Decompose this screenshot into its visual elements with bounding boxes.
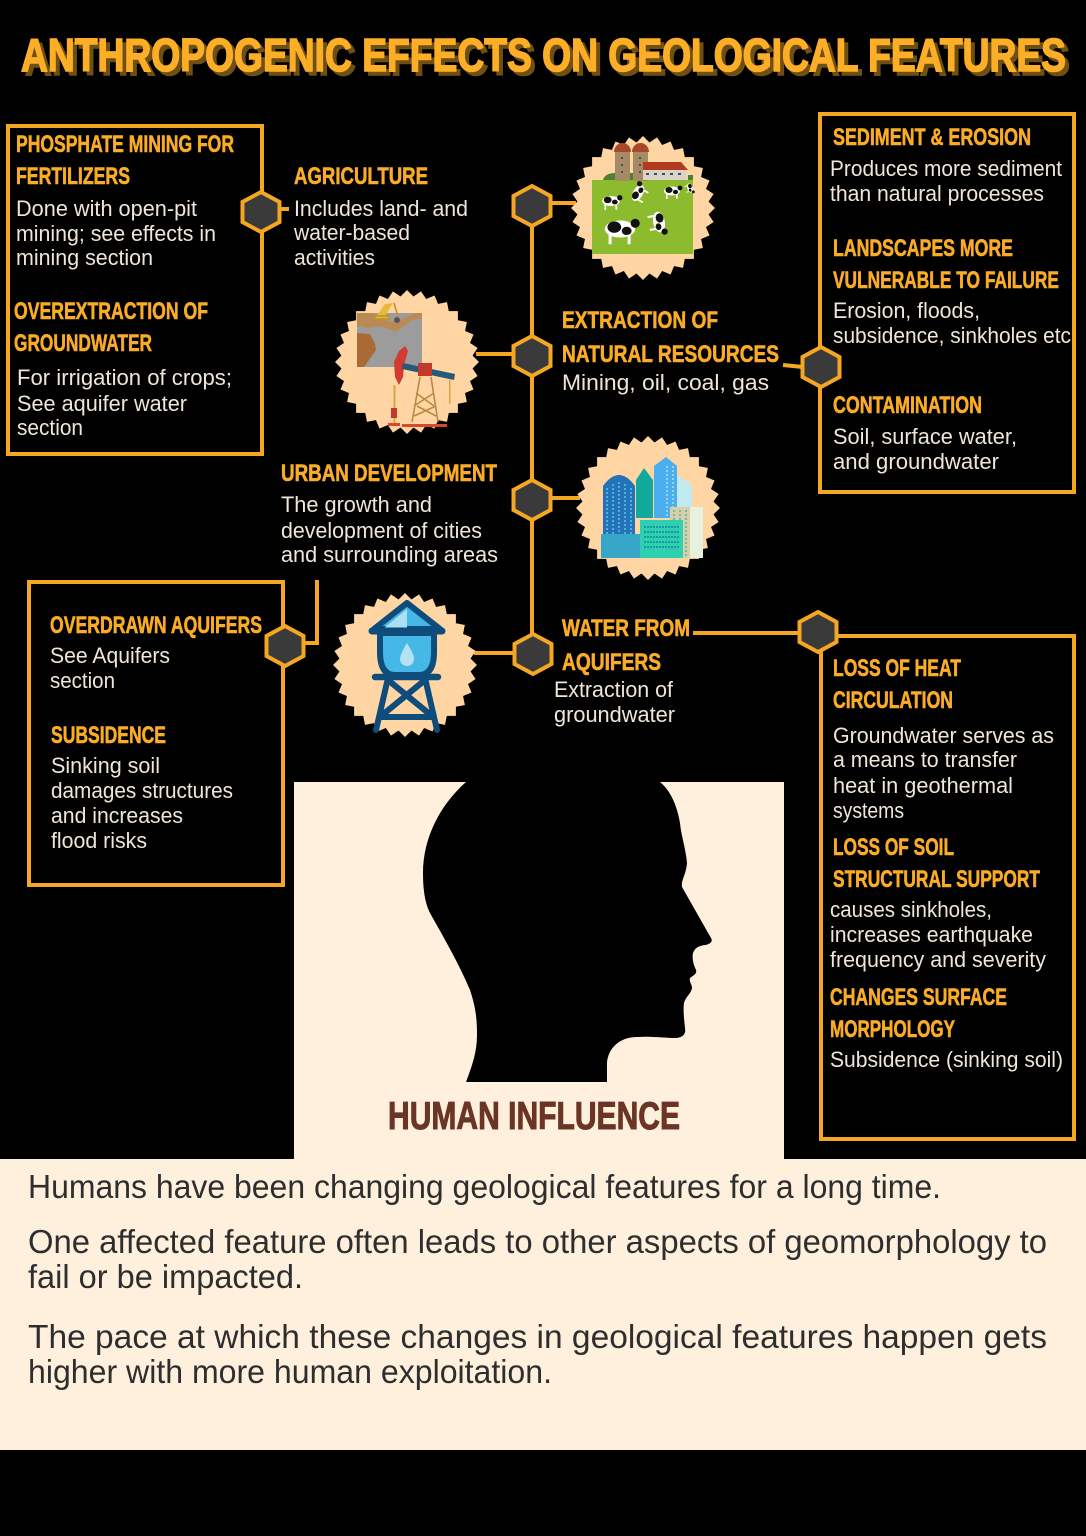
text: subsidence description: Sinking soil: [51, 753, 160, 778]
text: vulnerable description: subsidence, sinkholes etc: [833, 323, 1071, 348]
text: water from aquifers: [554, 615, 690, 727]
text: phosphate mining description: Done with open-pit: [16, 196, 198, 221]
text: agriculture: [293, 163, 468, 270]
text: soil support description: [830, 897, 1047, 972]
heading: contamination: CONTAMINATION: [833, 392, 982, 419]
text: urban development: and surrounding areas: [281, 542, 498, 567]
text: water from aquifers: groundwater: [554, 702, 675, 727]
text: heat description: heat in geothermal: [833, 773, 1013, 798]
panel: human influence: [294, 782, 784, 1160]
heading: overextraction: GROUNDWATER: [14, 330, 152, 357]
text: paragraph three: higher with more human exploitation.: [28, 1353, 552, 1390]
heading: overextraction: [14, 298, 208, 357]
heading: vulnerable landscapes: [833, 235, 1059, 294]
text: agriculture: water-based: [293, 220, 410, 245]
timeline connectors: [281, 203, 803, 654]
text: overextraction description: See aquifer water: [17, 391, 187, 416]
text: sediment description: than natural processes: [830, 181, 1044, 206]
text: extraction of natural resources: EXTRACTION OF: [562, 307, 718, 334]
text: paragraph one: Humans have been changing geological features for a long time.: [28, 1168, 941, 1205]
text: overextraction description: section: [17, 415, 83, 440]
icon: water tower badge: [333, 593, 477, 737]
text: agriculture: activities: [294, 245, 375, 270]
heading: phosphate mining: FERTILIZERS: [16, 163, 130, 190]
text: overextraction description: For irrigation of crops;: [17, 365, 232, 390]
text: heat description: a means to transfer: [833, 747, 1017, 772]
text: aquifers description: See Aquifers: [50, 643, 170, 668]
panel: summary: [0, 1159, 1086, 1450]
text: overextraction description: [17, 365, 232, 440]
text: paragraph two: [28, 1223, 1047, 1295]
text: water from aquifers: Extraction of: [554, 677, 674, 702]
panel: urban effects: [29, 582, 283, 885]
text: agriculture: Includes land- and: [294, 196, 468, 221]
text: heat description: systems: [833, 798, 904, 823]
text: sediment description: [830, 156, 1063, 206]
heading: changes surface morphology: CHANGES SURFACE: [830, 984, 1007, 1011]
heading: subsidence: SUBSIDENCE: [51, 722, 166, 749]
text: paragraph two: fail or be impacted.: [28, 1258, 303, 1295]
text: water from aquifers: WATER FROM: [562, 615, 690, 642]
text: aquifers description: section: [50, 668, 115, 693]
panel: extraction effects: [820, 114, 1074, 492]
heading: loss of heat circulation: LOSS OF HEAT: [833, 655, 961, 682]
text: soil support description: frequency and severity: [830, 947, 1047, 972]
icon: mining and oil badge: [335, 290, 479, 434]
text: agriculture: AGRICULTURE: [294, 163, 428, 190]
text: extraction of natural resources: Mining, oil, coal, gas: [562, 370, 769, 395]
text: paragraph two: One affected feature often leads to other aspects of geomorphology to: [28, 1223, 1047, 1260]
text: paragraph three: The pace at which these changes in geological features happen gets: [28, 1318, 1047, 1355]
text: soil support description: causes sinkholes,: [830, 897, 992, 922]
panel: agriculture effects: [8, 126, 262, 454]
text: subsidence description: and increases: [51, 803, 183, 828]
text: paragraph three: [28, 1318, 1047, 1390]
text: contamination description: and groundwater: [833, 449, 999, 474]
text: subsidence description: damages structures: [51, 778, 233, 803]
text: subsidence description: [51, 753, 233, 853]
text: aquifers description: [50, 643, 170, 693]
text: heat description: [833, 723, 1054, 823]
text: phosphate mining description: mining section: [16, 245, 153, 270]
text: urban development: development of cities: [281, 518, 482, 543]
panel: aquifer effects: [821, 636, 1074, 1139]
heading: phosphate mining: [16, 131, 234, 190]
text: extraction of natural resources: [562, 307, 779, 395]
heading: phosphate mining: PHOSPHATE MINING FOR: [16, 131, 234, 158]
text: morphology description: Subsidence (sinking soil): [830, 1047, 1063, 1072]
text: vulnerable description: [833, 298, 1071, 348]
text: phosphate mining description: mining; see effects in: [16, 221, 216, 246]
text: extraction of natural resources: NATURAL RESOURCES: [562, 341, 779, 368]
text: water from aquifers: AQUIFERS: [562, 649, 661, 676]
text: sediment description: Produces more sediment: [830, 156, 1063, 181]
heading: human influence: HUMAN INFLUENCE: [388, 1095, 680, 1138]
text: urban development: URBAN DEVELOPMENT: [281, 460, 497, 487]
heading: loss of heat circulation: [833, 655, 961, 714]
icon: farm badge: [571, 136, 715, 280]
text: subsidence description: flood risks: [51, 828, 147, 853]
heading: overextraction: OVEREXTRACTION OF: [14, 298, 208, 325]
text: phosphate mining description: [16, 196, 216, 270]
text: contamination description: [833, 424, 1017, 474]
heading: changes surface morphology: [830, 984, 1007, 1043]
text: urban development: [281, 460, 498, 567]
heading: vulnerable landscapes: LANDSCAPES MORE: [833, 235, 1013, 262]
hexagon nodes: [242, 186, 840, 674]
text: soil support description: increases earthquake: [830, 922, 1033, 947]
heading: loss of soil support: LOSS OF SOIL: [833, 834, 954, 861]
heading: overdrawn aquifers: OVERDRAWN AQUIFERS: [50, 612, 262, 639]
heading: loss of heat circulation: CIRCULATION: [833, 687, 953, 714]
icon: head silhouette: [423, 782, 712, 1082]
heading: loss of soil support: [833, 834, 1040, 893]
icon: city badge: [576, 436, 720, 580]
text: heat description: Groundwater serves as: [833, 723, 1054, 748]
text: urban development: The growth and: [281, 492, 432, 517]
text: contamination description: Soil, surface water,: [833, 424, 1017, 449]
text: vulnerable description: Erosion, floods,: [833, 298, 980, 323]
heading: changes surface morphology: MORPHOLOGY: [830, 1016, 955, 1043]
